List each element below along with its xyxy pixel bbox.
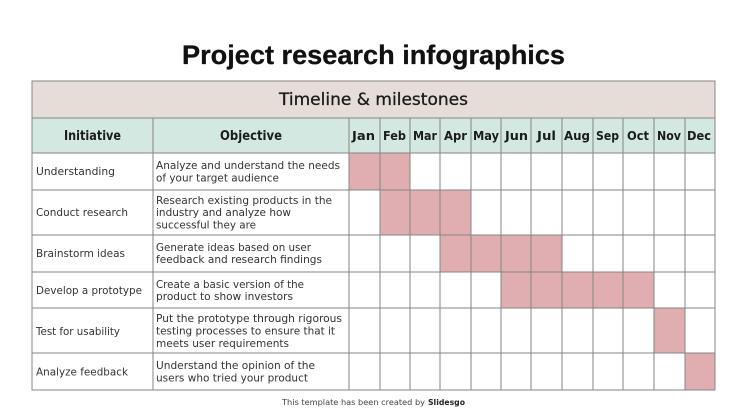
header row: Oct bbox=[627, 129, 649, 143]
row: Conduct research: industry and analyze how bbox=[156, 207, 291, 219]
row: Conduct research: successful they are bbox=[156, 220, 256, 232]
row: Develop a prototype: product to show investors bbox=[156, 291, 293, 303]
row: Understanding: of your target audience bbox=[156, 172, 279, 184]
row: Test for usability: testing processes to ensure that it bbox=[156, 326, 335, 338]
row: Test for usability: Test for usability bbox=[35, 326, 120, 338]
row: Conduct research: Conduct research bbox=[36, 207, 128, 219]
header row: Sep bbox=[596, 129, 619, 143]
panel: timeline table bbox=[32, 81, 715, 390]
row: Test for usability: Put the prototype through rigorous bbox=[156, 313, 342, 325]
title: Project research infographics bbox=[182, 40, 565, 70]
header row: Aug bbox=[564, 129, 590, 143]
header row: Initiative bbox=[64, 129, 121, 144]
row: Understanding: Analyze and understand the needs bbox=[156, 160, 340, 172]
row: Brainstorm ideas: feedback and research findings bbox=[156, 254, 322, 266]
row: Brainstorm ideas: Brainstorm ideas bbox=[36, 248, 125, 260]
row: Analyze feedback: Analyze feedback bbox=[36, 366, 129, 378]
header row: Mar bbox=[413, 129, 437, 143]
table title band bbox=[32, 81, 715, 118]
row: Develop a prototype: Develop a prototype bbox=[36, 285, 142, 297]
gantt bars bbox=[349, 153, 715, 390]
header row: Apr bbox=[444, 129, 467, 143]
row: Conduct research: Research existing products in the bbox=[156, 195, 332, 207]
footer credit: This template has been created by bbox=[281, 398, 426, 407]
row: Brainstorm ideas: Generate ideas based on user bbox=[156, 242, 312, 254]
header row: Dec bbox=[687, 129, 711, 143]
row: Conduct research bbox=[36, 195, 332, 232]
row: Analyze feedback: users who tried your product bbox=[156, 372, 308, 384]
header row: Jun bbox=[504, 129, 528, 143]
row: Develop a prototype bbox=[36, 279, 304, 303]
header row: Jan bbox=[351, 129, 375, 143]
header row: Jul bbox=[536, 129, 556, 143]
table title band: Timeline & milestones bbox=[278, 90, 468, 109]
row: Analyze feedback bbox=[36, 360, 315, 384]
header row bbox=[32, 118, 715, 153]
header row: Feb bbox=[383, 129, 406, 143]
footer credit: Slidesgo bbox=[428, 398, 465, 407]
header row: Objective bbox=[220, 129, 282, 144]
row: Understanding: Understanding bbox=[36, 166, 115, 178]
row: Analyze feedback: Understand the opinion of the bbox=[156, 360, 315, 372]
row: Test for usability bbox=[35, 313, 342, 350]
header row: Nov bbox=[657, 129, 681, 143]
row: Test for usability: meets user requirements bbox=[156, 338, 289, 350]
header row: May bbox=[473, 129, 499, 143]
row: Understanding bbox=[36, 160, 340, 184]
row: Brainstorm ideas bbox=[36, 242, 322, 266]
row: Develop a prototype: Create a basic version of the bbox=[156, 279, 304, 291]
